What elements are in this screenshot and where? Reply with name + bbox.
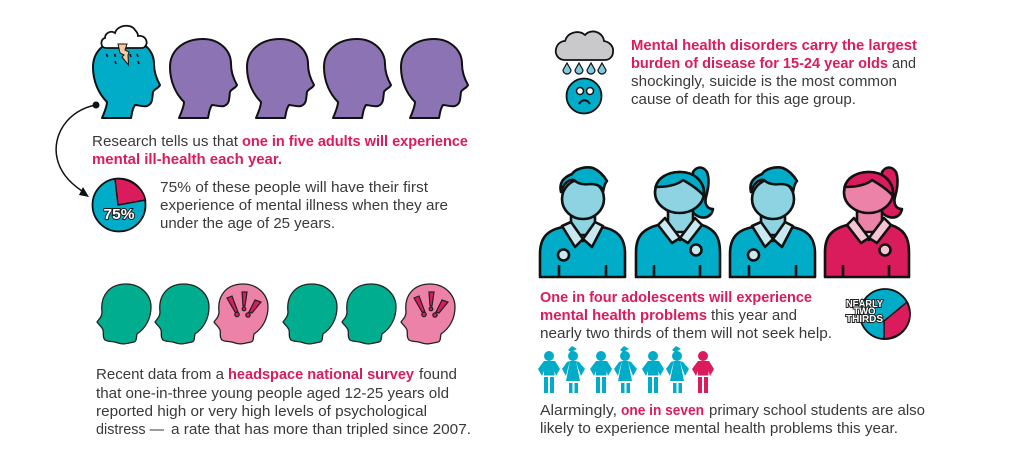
head row: one in five — [93, 26, 468, 118]
head row: one in three — [97, 284, 455, 344]
text: one in seven: Alarmingly, — [540, 402, 617, 419]
text: one in five adults — [92, 133, 468, 168]
text: one in four adolescents: One in four adolescents will experience — [540, 289, 812, 306]
icon: boy student 2 — [730, 167, 815, 277]
icon: student 7 highlighted — [692, 351, 714, 393]
text: headspace national survey: reported high or very high levels of psychological — [96, 403, 427, 420]
text: largest burden of disease — [631, 37, 917, 108]
icon: pink head with exclamation marks 2 — [401, 284, 455, 344]
text: one in four adolescents: nearly two thirds of them will not seek help. — [540, 325, 832, 342]
icon: purple head 1 — [170, 39, 237, 118]
text: headspace national survey — [96, 366, 471, 438]
text: one in seven: primary school students are also — [709, 402, 925, 419]
chart: nearly two thirds pie: TWO — [854, 306, 876, 318]
text: one in four adolescents: mental health problems — [540, 307, 707, 324]
icon: boy student 1 — [540, 167, 625, 277]
icon: purple head 2 — [247, 39, 314, 118]
text: headspace national survey: Recent data from a — [96, 366, 225, 383]
text: largest burden of disease: Mental health disorders carry the largest — [631, 37, 917, 54]
text: one in four adolescents — [540, 289, 832, 342]
icon: student 1 — [538, 351, 560, 393]
chart: 75% pie — [92, 178, 146, 232]
icon: student 6 — [666, 346, 689, 393]
text: one in seven: one in seven — [621, 402, 704, 419]
text: one in four adolescents: this year and — [711, 307, 797, 324]
panel: burden of disease — [556, 31, 917, 113]
icon: green head 4 — [342, 284, 396, 344]
icon: rain cloud and sad face — [556, 31, 613, 113]
text: one in seven: likely to experience mental health problems this year. — [540, 420, 898, 437]
icon: student 3 — [590, 351, 612, 393]
icon row: adolescents — [540, 167, 909, 277]
text: largest burden of disease: burden of disease for 15-24 year olds — [631, 55, 888, 72]
text: 75% first experience: under the age of 25 years. — [160, 215, 335, 232]
text: one in five adults: one in five adults will experience — [242, 133, 468, 150]
panel: one in five adults — [56, 26, 468, 232]
icon: purple head 4 — [401, 39, 468, 118]
text: 75% first experience — [160, 179, 448, 232]
pictogram: seven primary students — [538, 346, 714, 393]
icon: student 4 — [614, 346, 637, 393]
text: headspace national survey: found — [419, 366, 457, 383]
text: one in seven — [540, 402, 925, 437]
icon: girl student 1 — [636, 168, 720, 277]
chart: nearly two thirds pie: THIRDS — [846, 314, 883, 325]
icon: purple head 3 — [324, 39, 391, 118]
icon: pink head with exclamation marks 1 — [214, 284, 268, 344]
text: headspace national survey: headspace national survey — [228, 366, 415, 383]
panel: one in four adolescents — [540, 167, 910, 342]
icon: green head 3 — [283, 284, 337, 344]
text: 75% first experience: 75% of these people will have their first — [160, 179, 429, 196]
icon: girl student highlighted — [825, 168, 909, 277]
chart: 75% pie: 75% — [104, 206, 134, 223]
chart: nearly two thirds pie: NEARLY — [846, 299, 883, 310]
text: headspace national survey: that one-in-three young people aged 12-25 years old — [96, 385, 449, 402]
text: one in five adults: Research tells us that — [92, 133, 239, 150]
icon: student 5 — [642, 351, 664, 393]
icon: student 2 — [562, 346, 585, 393]
text: largest burden of disease: cause of death for this age group. — [631, 91, 856, 108]
icon: green head 2 — [155, 284, 209, 344]
text: largest burden of disease: and — [892, 55, 916, 72]
text: headspace national survey: a rate that has more than tripled since 2007. — [171, 421, 471, 438]
text: largest burden of disease: shockingly, suicide is the most common — [631, 73, 897, 90]
text: headspace national survey: distress — — [96, 421, 164, 438]
text: one in five adults: mental ill-health each year. — [92, 151, 282, 168]
text: 75% first experience: experience of mental illness when they are — [160, 197, 448, 214]
panel: one in three young people — [96, 284, 471, 438]
panel: one in seven primary students — [538, 346, 925, 437]
chart: nearly two thirds pie — [846, 289, 910, 339]
arrow: heads to pie — [56, 102, 100, 197]
icon: blue head with storm cloud — [93, 26, 160, 118]
icon: green head 1 — [97, 284, 151, 344]
